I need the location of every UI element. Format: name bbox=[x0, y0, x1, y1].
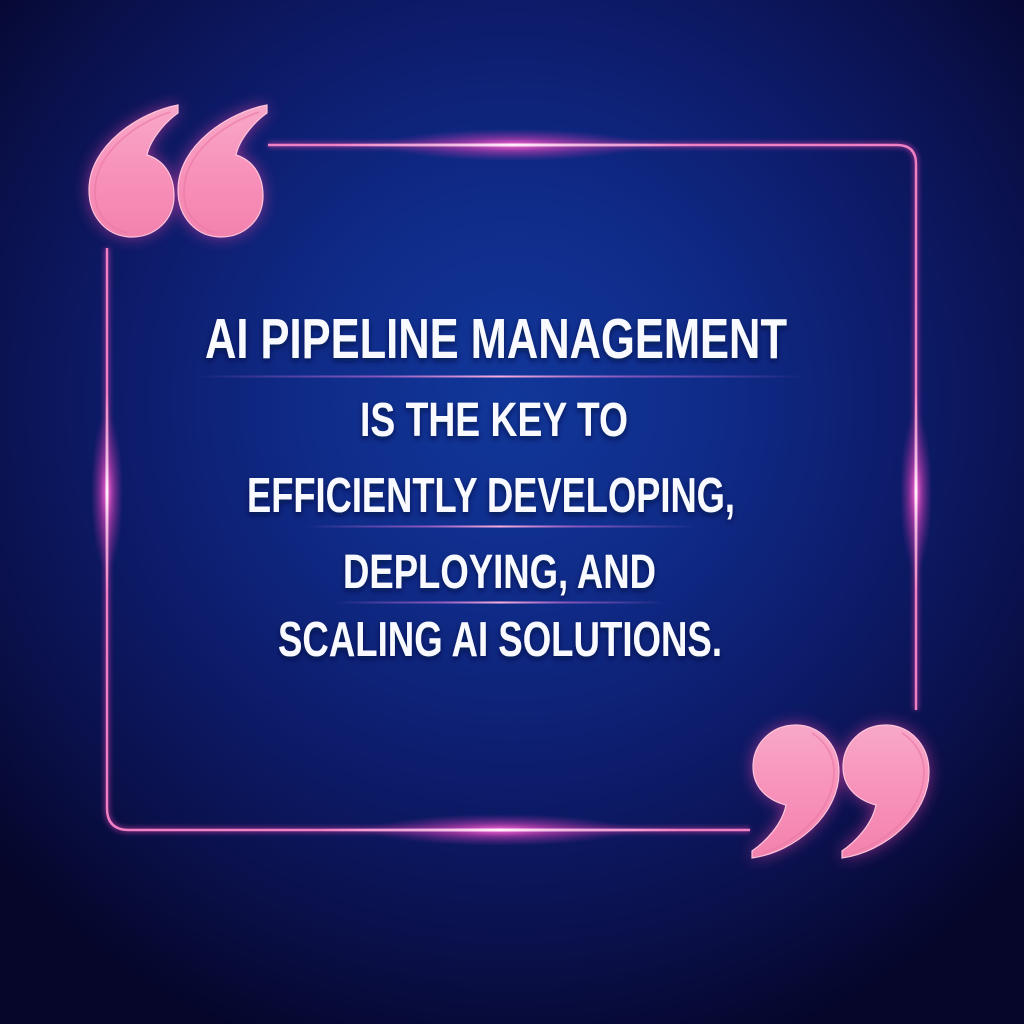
icon: opening quotation mark bbox=[89, 105, 267, 237]
icon: closing quotation mark bbox=[752, 725, 929, 858]
text: line 5: SCALING AI SOLUTIONS. bbox=[278, 613, 722, 667]
text: line 4: DEPLOYING, AND bbox=[343, 546, 656, 599]
text: line 2: IS THE KEY TO bbox=[360, 394, 628, 447]
quote text bbox=[205, 307, 787, 667]
divider lines bbox=[195, 376, 805, 604]
neon frame bbox=[91, 129, 932, 846]
heading: line 1: AI PIPELINE MANAGEMENT bbox=[205, 307, 787, 371]
light flares on frame bbox=[91, 129, 932, 846]
text: line 3: EFFICIENTLY DEVELOPING, bbox=[247, 469, 735, 523]
